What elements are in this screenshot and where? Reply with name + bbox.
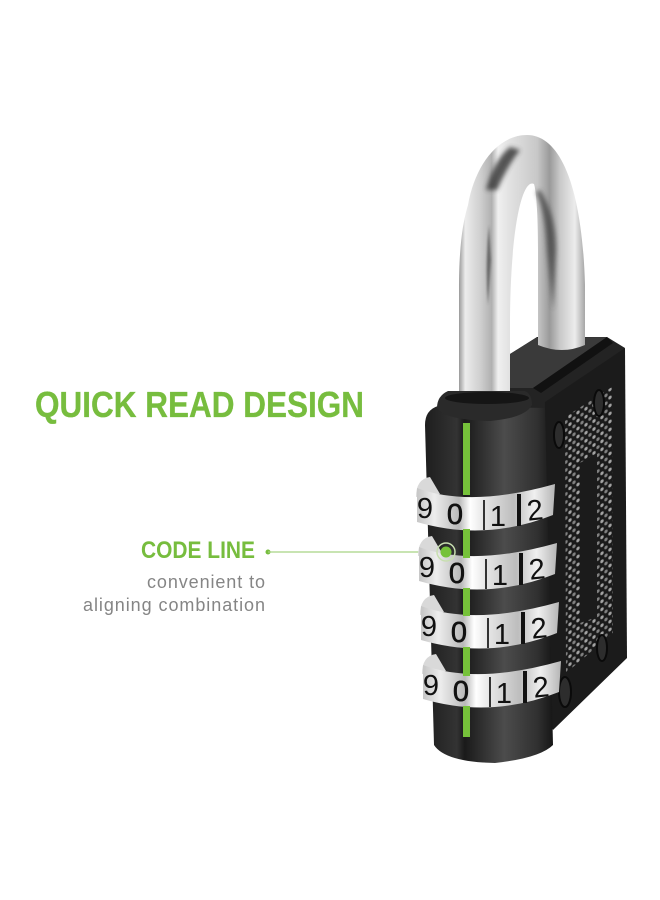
description text: aligning combination <box>83 595 265 615</box>
dial ring 3: 1 <box>494 619 510 651</box>
dial ring 4: 0 <box>453 676 469 708</box>
heading: QUICK READ DESIGN <box>35 384 364 425</box>
dial ring 1: 2 <box>525 494 545 528</box>
dial ring 4: 1 <box>496 678 512 710</box>
callout: code line: CODE LINE <box>141 537 255 564</box>
dial ring 2: 2 <box>527 553 547 587</box>
back plate <box>540 348 627 730</box>
rivets <box>554 390 607 707</box>
dial ring 3: 2 <box>529 612 549 646</box>
green code line <box>463 423 470 737</box>
dial ring 4: 9 <box>423 670 439 702</box>
description text <box>83 572 265 615</box>
dial ring 2 <box>418 536 557 592</box>
dial ring 3 <box>420 595 559 651</box>
dial ring 4: 2 <box>531 671 551 705</box>
dial ring 2: 0 <box>449 558 465 590</box>
dial ring 1: 9 <box>417 493 433 525</box>
dial ring 1 <box>416 477 555 533</box>
dotted grip <box>565 387 613 673</box>
dial ring 2: 1 <box>492 560 508 592</box>
shackle base plate <box>510 337 625 425</box>
dial ring 1: 1 <box>490 501 506 533</box>
description text: convenient to <box>147 572 265 592</box>
dial ring 3: 0 <box>451 617 467 649</box>
code line marker <box>437 543 455 561</box>
callout: code line <box>141 537 440 564</box>
dial ring 2: 9 <box>419 552 435 584</box>
dial ring 4 <box>422 654 561 710</box>
cylinder body <box>425 406 553 763</box>
dial ring 3: 9 <box>421 611 437 643</box>
dial ring 1: 0 <box>447 499 463 531</box>
shackle <box>459 135 585 405</box>
padlock <box>416 135 627 763</box>
top collar <box>437 391 532 421</box>
